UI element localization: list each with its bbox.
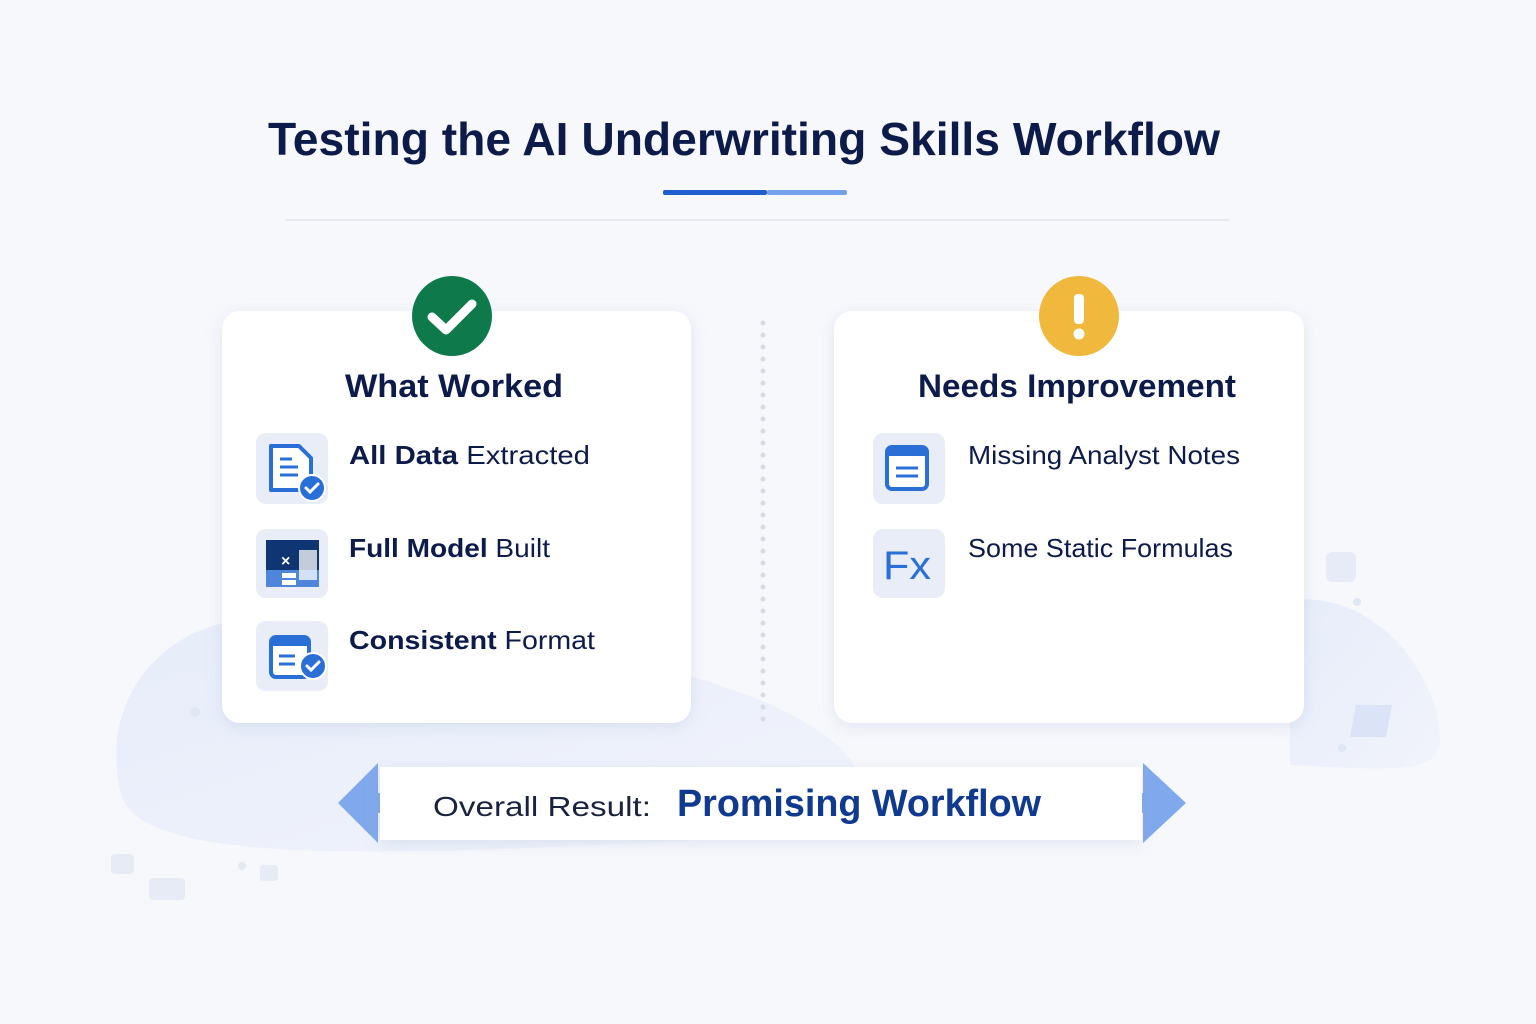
item: missing analyst notes (873, 433, 1240, 504)
heading: Needs Improvement: Needs Improvement (918, 368, 1236, 404)
panel: what worked (222, 276, 691, 723)
item: all data extracted (256, 433, 590, 504)
arrow: right (1118, 763, 1186, 843)
item: full model built: Full Model Built (349, 533, 551, 563)
item: some static formulas: Some Static Formulas (968, 533, 1233, 563)
icon: warning (1039, 276, 1119, 356)
title underline (663, 190, 847, 195)
background blobs (111, 552, 1440, 900)
banner: overall result: Overall Result: (433, 791, 651, 822)
heading: What Worked: What Worked (345, 368, 563, 404)
panel: needs improvement (834, 276, 1304, 723)
item: all data extracted: All Data Extracted (349, 440, 590, 470)
item: some static formulas (873, 529, 1233, 598)
banner: overall result: Promising Workflow (677, 783, 1041, 825)
item: some static formulas: Fx (883, 544, 931, 588)
item: missing analyst notes: Missing Analyst Notes (968, 440, 1240, 470)
icon: green check (412, 276, 492, 356)
item: full model built (256, 529, 551, 598)
item: consistent format (256, 621, 596, 691)
arrow: left (338, 763, 399, 843)
banner: overall result (338, 763, 1186, 843)
item: full model built: × (281, 553, 290, 570)
item: consistent format: Consistent Format (349, 625, 596, 655)
title: Testing the AI Underwriting Skills Workflow (268, 113, 1220, 165)
